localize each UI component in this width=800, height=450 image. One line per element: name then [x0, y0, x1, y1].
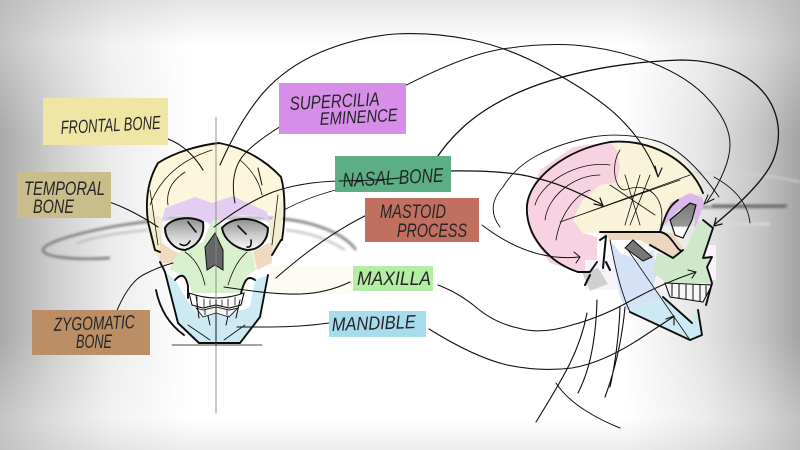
front skull	[147, 117, 284, 413]
pale cream smudge beside maxilla	[270, 266, 354, 294]
front skull: nasal cavity	[205, 233, 223, 270]
label: frontal bone	[43, 98, 168, 145]
side skull: ink outline	[527, 142, 713, 340]
label: supercilia eminence	[279, 83, 406, 134]
arrow: supercilia to front skull	[233, 113, 303, 203]
label: temporal bone: BONE	[33, 197, 74, 218]
front skull: temple fill	[147, 200, 283, 262]
arrow: nasal strike line to temple	[284, 178, 400, 210]
arrow: mastoid to front skull	[276, 211, 375, 278]
arrow: mastoid to side skull	[482, 225, 580, 263]
side skull: brow fill	[664, 193, 703, 228]
arrow: zygomatic bone to front skull	[115, 263, 173, 315]
side skull: mastoid grey	[582, 268, 608, 291]
front skull: brow fill	[162, 196, 270, 227]
front skull: mandible fill	[165, 272, 268, 343]
side skull: eye socket	[670, 203, 696, 238]
front skull: teeth	[189, 293, 244, 317]
side skull: maxilla fill	[653, 220, 713, 283]
blurred guide ellipses and streaks	[43, 173, 800, 259]
arcs around side skull	[493, 135, 750, 227]
leader lines and arrows	[91, 34, 778, 369]
front skull: eye sockets	[165, 218, 268, 250]
side skull	[527, 142, 716, 428]
side skull: upper jaw fill	[610, 240, 663, 310]
label: maxilla: MAXILLA	[357, 269, 431, 290]
front skull: center line	[215, 117, 217, 413]
side skull: dark mastoid strokes	[585, 236, 610, 285]
label: supercilia eminence: SUPERCILIA	[289, 89, 380, 115]
side skull: lilac smudge	[585, 245, 716, 290]
front skull: sketch lines	[150, 150, 278, 345]
label: temporal bone	[17, 172, 111, 218]
arrow: supercilia to side skull	[393, 45, 730, 204]
front skull: cheek dark strokes	[196, 168, 262, 325]
label: mastoid process	[365, 198, 479, 242]
arrow: mandible to side skull	[429, 316, 674, 369]
label: zygomatic bone: BONE	[76, 332, 112, 353]
arrow: maxilla to front skull	[224, 282, 350, 294]
arrow: frontal bone to front skull	[94, 132, 203, 170]
label: frontal bone: FRONTAL BONE	[60, 113, 161, 139]
label: temporal bone: TEMPORAL	[24, 179, 105, 200]
side skull: zygomatic fill	[600, 232, 683, 258]
label: supercilia eminence: EMINENCE	[319, 105, 399, 129]
side skull: parietal fill	[527, 142, 620, 273]
front skull: midface fill	[170, 220, 256, 293]
label: mastoid process: MASTOID	[380, 202, 446, 223]
label: zygomatic bone: ZYGOMATIC	[53, 312, 135, 336]
label: zygomatic bone	[32, 310, 150, 355]
side skull: rear jaw line	[610, 240, 630, 312]
label: mandible: MANDIBLE	[331, 312, 416, 336]
label: nasal bone: NASAL BONE	[342, 165, 445, 192]
side skull: neck lines	[536, 300, 625, 422]
label: mastoid process: PROCESS	[397, 221, 467, 242]
side skull: cheek opening	[625, 240, 652, 261]
arrow: nasal bone to side skull	[434, 60, 778, 226]
label: nasal bone	[335, 156, 451, 192]
front skull: zygomatic fills	[160, 233, 272, 270]
front skull: ink outline	[147, 143, 284, 343]
front skull: cranium fill	[147, 143, 284, 220]
arrow: nasal bone to side skull	[444, 171, 603, 206]
side skull: trailing neck curve	[556, 383, 620, 428]
side skull: mandible fill	[627, 297, 702, 340]
arrow: maxilla to side skull	[438, 270, 696, 331]
arrow: temporal bone to front skull	[91, 197, 158, 227]
arrow: mandible to front skull	[237, 323, 329, 327]
side skull: frontal fill	[573, 142, 703, 233]
arrow: nasal bone to front skull	[214, 181, 339, 227]
side skull: sketch lines	[535, 150, 690, 340]
side skull: teeth	[665, 283, 712, 302]
arrow: frontal bone to side skull	[220, 34, 662, 177]
